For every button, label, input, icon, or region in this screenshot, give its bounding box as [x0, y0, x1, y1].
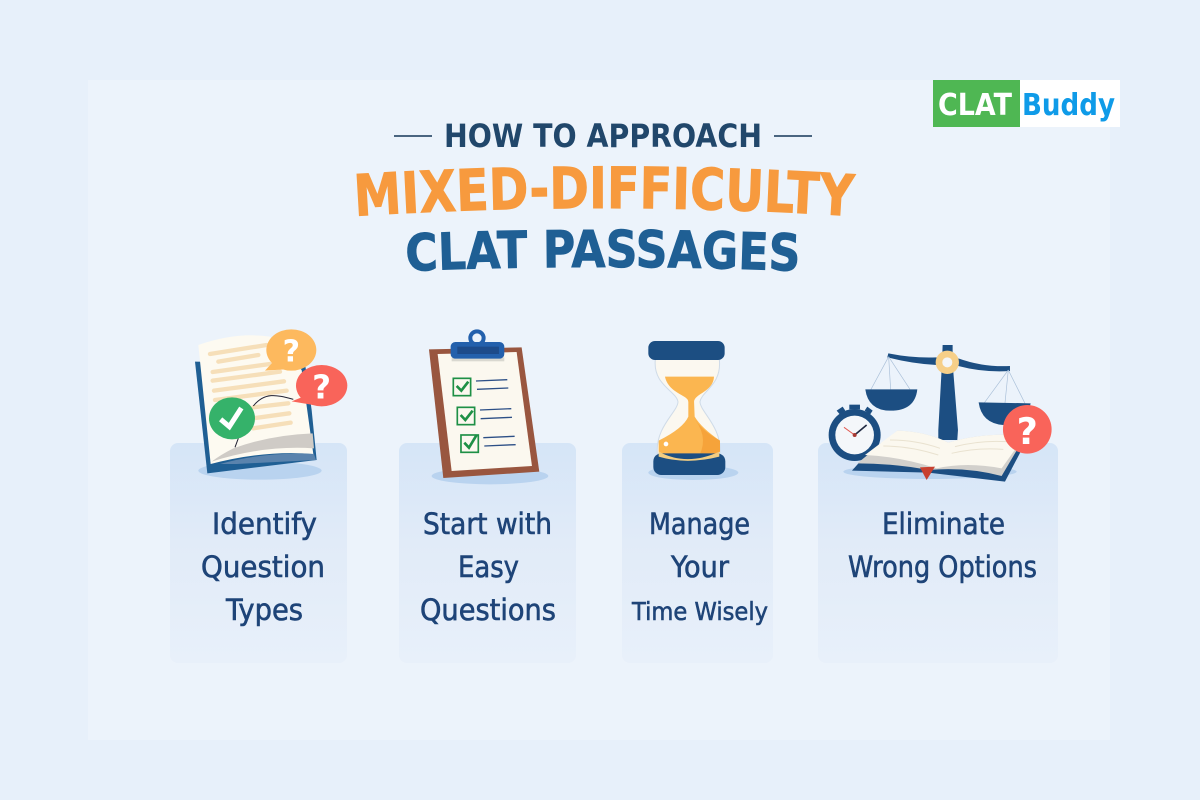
logo: CLATBuddy: [933, 80, 1120, 127]
card 4 label: [848, 507, 1037, 584]
card 3 background: [622, 443, 773, 663]
card 2 label: Easy: [458, 550, 519, 584]
card 2: start with easy questions: [399, 331, 576, 663]
icon: hourglass: [648, 341, 738, 480]
card 1: identify question types: [170, 329, 347, 663]
title line: mixed-difficulty: MIXED-DIFFICULTY: [356, 166, 856, 216]
card 3 label: Manage: [649, 507, 750, 541]
card 4 background: [818, 443, 1058, 663]
card 4 label: Wrong Options: [848, 550, 1037, 584]
card 4: eliminate wrong options: [818, 345, 1058, 663]
card 1 label: Question: [201, 550, 325, 584]
icon: scales, stopwatch and book: ?: [1017, 410, 1038, 453]
card 1 label: [201, 507, 325, 627]
card 3 label: Time Wisely: [631, 597, 768, 626]
title: [356, 117, 856, 272]
background panel: [88, 80, 1110, 740]
logo: CLATBuddy: CLAT: [938, 88, 1012, 123]
title line: clat passages: CLAT PASSAGES: [407, 228, 798, 272]
title line: how to approach: HOW TO APPROACH: [444, 117, 762, 155]
card 4 label: Eliminate: [882, 507, 1005, 541]
icon: open book with question bubbles: [195, 329, 347, 480]
icon: open book with question bubbles: ?: [283, 335, 300, 370]
icon: scales, stopwatch and book: [829, 345, 1052, 482]
icon: clipboard checklist: [429, 331, 548, 484]
card 3 label: [631, 507, 768, 626]
card 1 background: [170, 443, 347, 663]
card 2 background: [399, 443, 576, 663]
card 3: manage your time wisely: [622, 341, 773, 663]
icon: open book with question bubbles: ?: [312, 369, 331, 407]
logo: CLATBuddy: Buddy: [1022, 88, 1115, 123]
card 2 label: Questions: [420, 593, 556, 627]
card 1 label: Types: [225, 593, 303, 627]
card 2 label: [420, 507, 556, 627]
card 1 label: Identify: [212, 507, 317, 541]
card 2 label: Start with: [423, 507, 552, 541]
card 3 label: Your: [670, 550, 729, 584]
